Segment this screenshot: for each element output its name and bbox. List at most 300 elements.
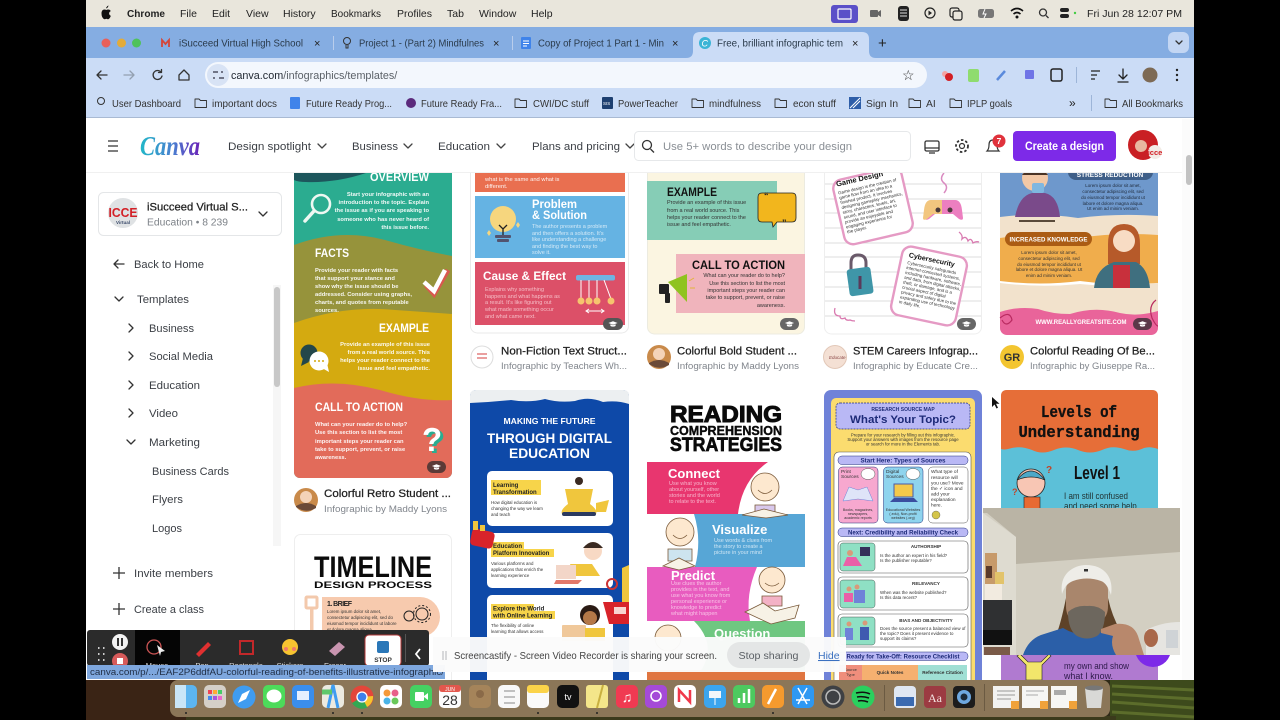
premium badge — [957, 318, 976, 330]
box: learning transformation: and teach — [491, 512, 511, 517]
canva logo: Canva — [140, 131, 200, 161]
box: learning transformation: Transformation — [493, 490, 537, 496]
tab: Copy of Project 1: Copy of Project 1 Part 1 - Min — [538, 38, 664, 50]
tab list button — [1168, 32, 1189, 53]
bookmarks bar: PowerTeacher — [618, 99, 679, 110]
bookmarks bar: Future Ready Prog... — [306, 99, 392, 110]
user avatar: icce — [1148, 148, 1162, 157]
template card: Through Digital Education — [469, 390, 629, 690]
section: predict: use what you know from — [671, 593, 731, 599]
header: types of sources: Start Here: Types of Sources — [860, 459, 946, 465]
icon: quote bubble: ” — [782, 218, 786, 228]
template card: Non-Fiction Text Structures — [470, 160, 628, 372]
bookmarks bar: AI — [926, 99, 936, 110]
section: call to action: Use this section to list the most — [709, 281, 785, 287]
tab: Copy of Project 1: × — [672, 38, 678, 50]
pill: stress reduction: consectetur adipiscing elit, sed — [1082, 189, 1144, 194]
nav tree: Flyers — [152, 494, 183, 506]
row: bias and objectivity — [838, 614, 968, 647]
step: brief: consectetur adipiscing elit, sed do — [327, 615, 393, 620]
section: predict: knowledge to predict — [671, 605, 722, 611]
box: education platform innovation — [487, 533, 613, 588]
frame: cybersecurity: in daily life. — [899, 299, 921, 309]
section: facts: that support your stance and — [315, 276, 395, 282]
section: cause and effect: Cause & Effect — [483, 271, 566, 283]
icon: desktop — [925, 141, 939, 153]
button: stop sharing: Stop sharing — [738, 650, 799, 662]
frame: cybersecurity: including hardware, software, — [905, 270, 962, 287]
row: authorship: Is the publisher reputable? — [880, 558, 932, 563]
author row: Infographic by Teachers Wh... — [501, 361, 627, 372]
section: call to action: important steps your reader can — [707, 288, 785, 294]
premium badge — [780, 318, 799, 330]
frame: game design: designing gameplay mechanics, — [841, 191, 903, 210]
bookmarks bar: IPLP goals — [967, 99, 1012, 110]
section: visualize: picture in your mind — [714, 550, 762, 556]
section: overview: this issue before. — [381, 225, 429, 231]
section: visualize: Visualize — [712, 522, 767, 537]
browser tab strip — [86, 27, 1194, 58]
icon: question mark: ? — [425, 423, 445, 460]
pill: stress reduction: Lorem ipsum dolor sit amet, — [1085, 183, 1141, 188]
section: call to action — [315, 402, 408, 461]
bookmarks bar — [86, 91, 1194, 118]
team switcher: ICCE — [108, 205, 138, 220]
back to home: Back to Home — [134, 259, 204, 271]
icon: settings gear — [956, 140, 968, 152]
illustration: student with mask — [1015, 165, 1060, 222]
section: cause and effect: what made something occur — [484, 307, 554, 313]
link status bubble — [87, 665, 445, 679]
section: call to action: What can your reader do to help? — [703, 273, 785, 279]
author row: STEM Careers Infograp... — [853, 346, 978, 358]
header: types of sources — [838, 456, 968, 465]
bookmarks bar: User Dashboard — [112, 99, 181, 110]
section: problem and solution: and then offers a solution. It's — [532, 231, 604, 237]
active tab: Canva — [686, 32, 876, 58]
button: stop — [365, 635, 401, 666]
template gallery — [294, 150, 1158, 694]
frame: cybersecurity: crucial aspect of digital — [902, 285, 946, 299]
blue shirt — [1023, 628, 1117, 655]
heading — [487, 418, 612, 458]
heading: Understanding — [1018, 424, 1140, 443]
author row: GR — [1004, 352, 1020, 364]
create a class — [113, 603, 204, 616]
box: digital sources: (.edu), Non-profit — [889, 512, 917, 516]
intro text: Prepare for your research by filling out this infographic. — [851, 432, 955, 438]
pill: stress reduction — [1068, 163, 1153, 211]
section: facts: addressed. Consider using graphs, — [315, 292, 412, 298]
section: overview: OVERVIEW — [370, 172, 429, 184]
active tab: Canva: × — [852, 38, 858, 50]
navigation menu: Design spotlight — [228, 141, 312, 153]
box: digital sources: Educational Websites — [886, 508, 920, 512]
section: cause and effect: happens and what happens as — [485, 294, 560, 300]
section: predict: Use clues the author — [671, 581, 722, 587]
bookmarks bar: important docs — [212, 99, 277, 110]
intro text — [847, 432, 959, 446]
user avatar — [1128, 130, 1162, 160]
section: example: helps your reader connect to the — [667, 215, 746, 221]
box: resource prompt: explanation — [931, 497, 956, 503]
section: call to action: awareness. — [757, 303, 785, 309]
decoration: pencil pouches — [469, 521, 629, 624]
template card: Colorful Retro Student — [294, 150, 452, 515]
frame: cybersecurity: expanding use of technology — [900, 294, 956, 311]
section: example — [647, 181, 796, 240]
section: problem and solution — [475, 196, 625, 258]
section: overview: someone who has never heard of — [337, 217, 429, 223]
author row: Infographic by Educate Cre... — [853, 361, 978, 372]
tool: rectangle — [229, 641, 263, 670]
tab: iSucceed: iSucceed Virtual High School — [179, 38, 303, 50]
heading — [670, 406, 782, 452]
level bottom panel: my own and show — [1064, 661, 1129, 671]
section: example — [340, 323, 431, 372]
menu items: Window — [479, 8, 517, 20]
step: brief: Lorem ipsum dolor sit amet, — [327, 609, 381, 614]
pill: increased knowledge — [1005, 232, 1092, 278]
section: problem and solution: & Solution — [532, 210, 587, 222]
tab: Project 1: × — [493, 38, 499, 50]
box: learning transformation: changing the way we learn — [491, 506, 544, 511]
hand — [1101, 624, 1144, 655]
team switcher — [98, 192, 282, 236]
table header: Type — [846, 672, 856, 677]
pill: stress reduction: labore et dolore magna aliqua. — [1083, 201, 1143, 206]
collapse arrow — [405, 634, 420, 662]
tab: iSucceed: × — [314, 38, 320, 50]
tool: eraser: Eraser — [324, 661, 347, 670]
box: explore the world: learning that allows access — [491, 629, 544, 634]
pill: stress reduction: do eiusmod tempor incididunt ut — [1081, 195, 1146, 200]
white panel — [834, 452, 971, 692]
icon: apple logo — [102, 5, 111, 19]
section: connect: Use what you know — [669, 481, 717, 487]
active tab: Canva: C — [702, 38, 708, 48]
menu items: Edit — [212, 8, 230, 20]
box: resource prompt: here. — [931, 502, 942, 508]
section: facts: sources. — [315, 308, 339, 314]
icon: magnifier — [305, 195, 330, 221]
monitor — [983, 600, 1012, 655]
page background — [86, 118, 1194, 680]
button: create a design — [1013, 131, 1116, 161]
premium badge — [603, 318, 623, 330]
author row: Non-Fiction Text Struct... — [501, 346, 627, 358]
heading: THROUGH DIGITAL — [487, 430, 612, 446]
frame: game design: sound, and user interface to — [843, 203, 898, 220]
extension icons — [942, 67, 1178, 83]
box: digital sources — [884, 467, 923, 523]
author row — [1000, 345, 1155, 372]
level bottom panel — [1001, 650, 1158, 681]
navigation menu — [228, 141, 634, 153]
heading: Levels of — [1041, 404, 1117, 423]
link status bubble: canva.com/p/.../EAF2P6ddfAU-colorful-reading-of-benefits-illustrative-infographic/ — [90, 667, 445, 677]
section: problem and solution: Problem — [532, 199, 577, 211]
section: call to action: CALL TO ACTION — [692, 258, 785, 272]
section: problem and solution: solve it. — [532, 250, 551, 256]
section: example: from a real world source. This — [667, 208, 740, 214]
section: example: issue and feel empathetic. — [667, 222, 731, 228]
nav tree: Social Media — [149, 351, 214, 363]
box: resource prompt: you use? Move — [931, 480, 964, 486]
template card: Levels of Understanding — [1001, 390, 1158, 681]
tool: mouse: Mouse — [146, 661, 168, 670]
heading: EDUCATION — [509, 445, 590, 461]
bookmarks bar: Sign In — [866, 99, 898, 110]
icon: check mark — [424, 270, 448, 294]
browser toolbar — [86, 58, 1194, 91]
box: print sources: Books, magazines, — [843, 508, 873, 512]
menu items: Tab — [447, 8, 464, 20]
frame: game design: provide an enjoyable and — [844, 209, 894, 225]
pill: increased knowledge: Lorem ipsum dolor sit amet, — [1021, 250, 1077, 255]
frame: cybersecurity — [889, 245, 969, 327]
box: resource prompt: add your — [931, 492, 950, 498]
header: resource checklist: Ready for Take-Off: Resource Checklist — [846, 655, 960, 661]
level 1 text — [1064, 463, 1139, 511]
nav tree: Templates — [137, 294, 189, 306]
macOS dock: ♫ — [622, 689, 632, 705]
address bar: canva.com/infographics/templates/ — [231, 70, 397, 82]
frame: game design: finished product. It involves — [840, 188, 893, 205]
template card: Non-Fiction Text Structures: different. — [485, 184, 508, 190]
icon: newton cradle — [576, 275, 615, 313]
bookmarks bar: CWI/DC stuff — [533, 99, 589, 110]
pill: stress reduction: STRESS REDUCTION — [1077, 172, 1144, 179]
bookmarks bar: econ stuff — [793, 99, 836, 110]
section: facts: Provide your reader with facts — [315, 268, 398, 274]
section: connect: stories and the world — [669, 493, 720, 499]
author row — [647, 345, 799, 372]
section: call to action: important steps your reader can — [315, 439, 404, 445]
tab: Project 1: Project 1 - (Part 2) Mindfulnes — [359, 38, 484, 50]
person — [1023, 565, 1144, 655]
frame: cybersecurity: internet-connected systems, — [906, 265, 961, 281]
section: cause and effect — [475, 262, 625, 325]
heading — [1018, 404, 1140, 443]
row: bias and objectivity: the topic? Does it present evidence to — [880, 631, 954, 636]
canva header — [86, 119, 1194, 173]
navigation menu: Plans and pricing — [532, 141, 620, 153]
level 1 text: and need some help. — [1064, 501, 1139, 511]
box: print sources: Print — [841, 469, 852, 475]
pill: increased knowledge: enim ad minim veniam. — [1026, 273, 1072, 278]
box: explore the world — [487, 595, 613, 685]
box: learning transformation: How digital education is — [491, 500, 538, 505]
section: overview: introduction to the topic. Explain — [338, 200, 429, 206]
tab: Copy of Project 1 — [512, 36, 678, 50]
desktop wallpaper — [86, 660, 1194, 720]
section: predict — [647, 567, 757, 621]
bookmarks bar: mindfulness — [709, 99, 761, 110]
template card: Colorful Bold Student — [647, 160, 805, 372]
window controls — [102, 38, 141, 48]
intro text: Support your answers with images from the resource page — [847, 437, 959, 442]
frame: cybersecurity: and data, from digital attacks, — [904, 275, 961, 292]
author row: Colorful Reading Of Be... — [1030, 346, 1155, 358]
box: digital sources: websites (.org) — [891, 516, 915, 520]
level 1 text: Level 1 — [1074, 463, 1120, 483]
posters on wall — [985, 553, 1004, 600]
table header: Source — [844, 667, 858, 672]
author row: Colorful Retro Student ... — [324, 488, 451, 500]
section: example: EXAMPLE — [667, 185, 717, 199]
pill: increased knowledge: do eiusmod tempor incididunt ut — [1017, 262, 1082, 267]
title box — [836, 403, 970, 429]
row: authorship — [838, 541, 968, 573]
menu items — [127, 8, 553, 20]
frame: cybersecurity: privacy and safety due to the — [901, 289, 957, 306]
nav tree: Business — [149, 323, 194, 335]
header: credibility check: Next: Credibility and Reliability Check — [848, 531, 959, 537]
hamburger menu — [108, 141, 118, 151]
illustration: confused kid — [1012, 465, 1052, 509]
step: brief: 1. BRIEF — [327, 601, 353, 608]
tab: Project 1 — [333, 36, 499, 50]
box: digital sources: Digital — [886, 469, 899, 475]
row: relevancy: When was the website published? — [880, 590, 947, 595]
row: bias and objectivity: Does the source present a balanced view of — [880, 626, 966, 631]
box: resource prompt: the ✓ icon and — [931, 486, 963, 492]
frame: game design: game flow from an idea to a — [839, 183, 893, 200]
menu items: Profiles — [397, 8, 432, 20]
pill: increased knowledge: labore et dolore magna aliqua. Ut — [1016, 267, 1083, 272]
section: problem and solution: The author presents a problem — [532, 224, 608, 230]
frame: game design — [831, 166, 915, 246]
icon: notification bell: 7 — [997, 136, 1002, 146]
icon: chat bubbles — [300, 344, 329, 372]
canva help button peeking under camera — [1135, 631, 1171, 667]
step: brief — [306, 597, 440, 638]
title box: RESEARCH SOURCE MAP — [871, 407, 935, 413]
section: call to action — [659, 254, 805, 313]
search box — [634, 132, 910, 160]
long hair — [1058, 598, 1120, 638]
step: brief: eiusmod tempor incididunt ut labore — [327, 621, 397, 626]
nav tree: Business Cards — [152, 466, 229, 478]
author row — [824, 346, 978, 372]
illustration: confused kid: ? — [1046, 465, 1052, 476]
box: explore the world: The flexibility of online — [491, 623, 535, 628]
pill: increased knowledge: INCREASED KNOWLEDGE — [1010, 236, 1088, 244]
author row — [294, 488, 451, 515]
section: predict: personal experience or — [671, 599, 727, 605]
box: education platform innovation: Various platforms and — [491, 561, 534, 566]
icon: question mark: ? — [422, 421, 442, 458]
box: print sources: Sources — [841, 474, 859, 480]
section: call to action: CALL TO ACTION — [315, 402, 403, 414]
screen sharing bar: Screencastify - Screen Video Recorder is sharing your screen. — [454, 651, 717, 662]
table header — [839, 665, 967, 681]
pause button — [112, 634, 128, 650]
author row: Infographic by Maddy Lyons — [324, 504, 447, 515]
icon: quote bubble: “ — [764, 191, 768, 201]
running app indicators — [185, 712, 774, 714]
section: call to action: What can your reader do to help? — [315, 422, 408, 428]
box: resource prompt — [928, 467, 968, 523]
box: explore the world: Explore the World — [493, 606, 545, 612]
button: stop: STOP — [374, 657, 392, 664]
section: example: Provide an example of this issue — [340, 342, 431, 348]
header: credibility check — [838, 528, 968, 537]
section: visualize: Use words & clues from — [714, 538, 772, 544]
section: connect: Connect — [668, 466, 721, 481]
navigation menu: Education — [438, 141, 490, 153]
pill: increased knowledge: consectetur adipiscing elit, sed — [1018, 256, 1080, 261]
level 1 text: I am still confused — [1064, 491, 1128, 501]
box: education platform innovation: applications that enrich the — [491, 567, 544, 572]
section: connect: about yourself, other — [669, 487, 719, 493]
nav tree: Education — [149, 380, 200, 392]
menu items: View — [246, 8, 269, 20]
macOS dock: tv — [564, 692, 572, 702]
white beanie — [1062, 565, 1112, 595]
section: cause and effect: and what came next. — [485, 314, 536, 320]
macOS dock: 28 — [442, 692, 458, 708]
icon: padlock — [846, 255, 874, 297]
tool: eraser — [324, 642, 347, 670]
nav tree: Marketing — [149, 437, 200, 449]
frame: game design: engaging experience for — [845, 214, 893, 230]
section: call to action: take to support, prevent, or raise — [706, 295, 785, 301]
decoration: scribble — [1000, 300, 1158, 326]
tool: rectangle: Rectangle — [229, 661, 263, 670]
screen sharing bar — [433, 637, 846, 672]
step: brief: et dolore magna aliqua. — [327, 627, 373, 632]
section: example: helps your reader connect to the — [340, 358, 431, 364]
beard — [1068, 606, 1105, 638]
icon: megaphone — [659, 274, 695, 303]
section: facts — [315, 248, 412, 314]
section: overview — [335, 172, 429, 231]
section: overview: Start your infographic with an — [347, 192, 429, 198]
section: call to action: awareness. — [315, 455, 347, 461]
link: hide: Hide — [818, 650, 840, 662]
section: question — [647, 621, 805, 682]
team switcher: Virtual — [116, 220, 130, 225]
menu items: Help — [531, 8, 553, 20]
row: relevancy: Is this data recent? — [880, 595, 918, 600]
section: facts: show why the issue should be — [315, 284, 399, 290]
icon: quote bubble — [758, 191, 796, 228]
clock: Fri Jun 28 12:07 PM — [1087, 8, 1182, 20]
menu items: History — [283, 8, 316, 20]
table header: Reference Citation — [922, 670, 963, 675]
box: digital sources: Sources — [886, 474, 904, 480]
frame: cybersecurity: Cybersecurity safeguards — [907, 260, 957, 275]
left wall — [983, 513, 1016, 655]
icon: light bulb — [487, 206, 520, 242]
heading: TIMELINE — [314, 551, 432, 584]
heading — [314, 556, 432, 588]
address bar — [205, 62, 927, 88]
section: predict: Predict — [671, 568, 716, 583]
pill: stress reduction: Ut enim ad minim veniam. — [1087, 206, 1139, 211]
icon: question mark — [424, 428, 444, 453]
tool: stickers — [277, 639, 304, 670]
icon: notification bell — [987, 134, 1006, 151]
macOS dock — [170, 680, 1110, 717]
section: visualize — [694, 514, 805, 567]
section: connect — [647, 462, 768, 514]
ceiling — [983, 508, 1180, 564]
tool: mouse — [146, 640, 168, 670]
template card: Colorful Reading Of Benefits — [1000, 150, 1158, 372]
